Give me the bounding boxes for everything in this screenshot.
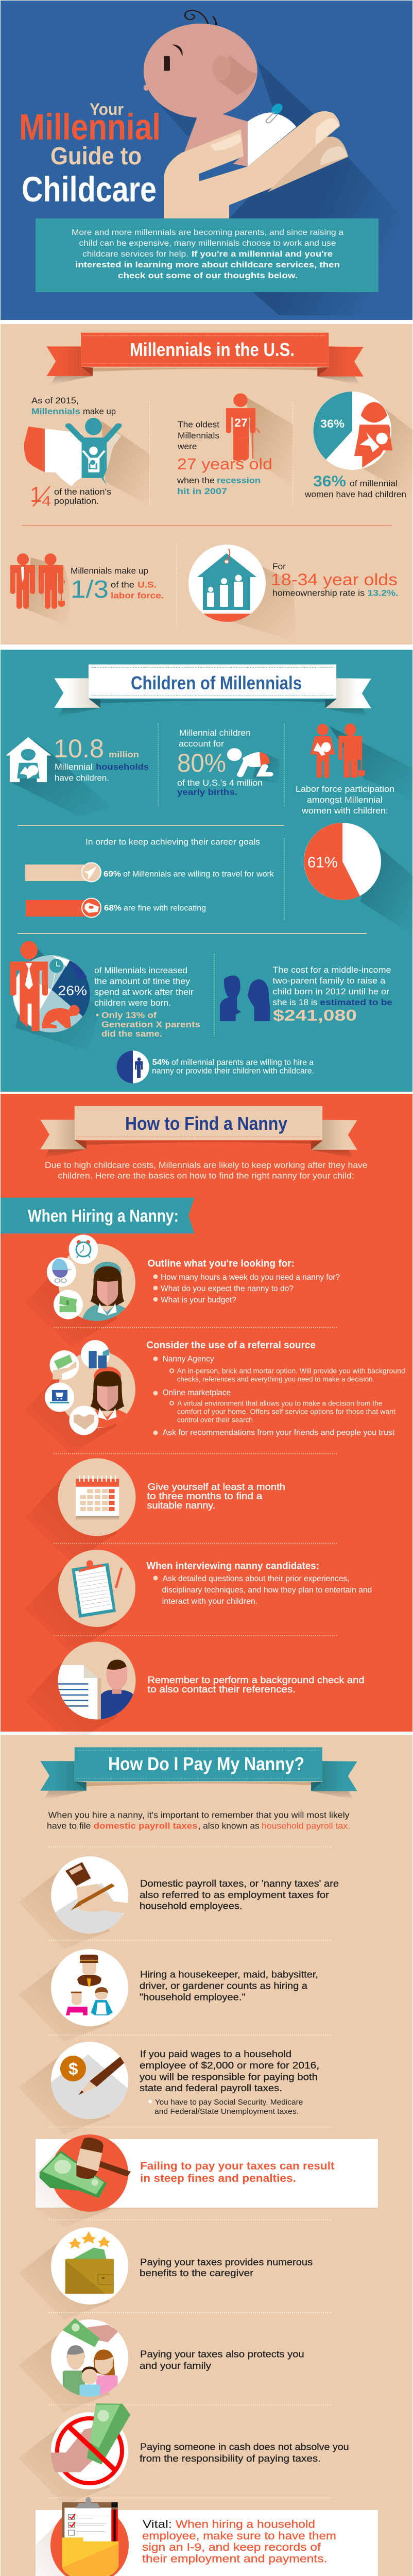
step: outline what you are looking for xyxy=(25,1234,340,1347)
stat: 10.8 million households xyxy=(6,734,149,816)
bar: relocating 68%: are fine with relocating xyxy=(124,904,206,913)
stat: 36% pie chart: of millennial xyxy=(350,479,398,488)
title: Childcare xyxy=(22,170,157,209)
stat: homeownership xyxy=(188,545,399,641)
ribbon heading: Children of Millennials xyxy=(54,665,371,717)
intro panel: interested in learning more about childcare services, then xyxy=(75,261,340,269)
item: household employee: driver, or gardener counts as hiring a xyxy=(140,1980,308,1991)
item: cash does not absolve: Paying someone in cash does not absolve you xyxy=(140,2442,349,2452)
stat: 80% of yearly births: account for xyxy=(179,739,224,749)
item: household employee xyxy=(19,1949,318,2042)
step: interviewing: When interviewing nanny candidates: xyxy=(146,1561,319,1572)
icon: alarm clock xyxy=(69,1234,98,1264)
callout: vital: employee, make sure to have them xyxy=(142,2530,336,2542)
stat: cost of raising a child: $241,080 xyxy=(273,1006,357,1024)
intro panel: childcare services for help. xyxy=(82,250,188,259)
item: paid wages: state and federal payroll taxes. xyxy=(140,2082,282,2093)
stat: 26% more time at work: 26% xyxy=(58,983,87,998)
icon: laptop with cart xyxy=(45,1383,74,1412)
step: outline what you are looking for: Outline what you're looking for: xyxy=(147,1259,295,1269)
icon: family and money xyxy=(63,2325,118,2398)
stat: one quarter of population xyxy=(24,396,150,509)
ribbon heading: How Do I Pay My Nanny xyxy=(40,1747,357,1800)
step: background check xyxy=(25,1641,365,1745)
stat: 36% pie chart: 36% xyxy=(320,417,345,430)
stat: labor force: U.S. xyxy=(137,580,157,590)
stat: 26% more time at work: Generation X parents xyxy=(101,1020,200,1029)
step: referral source: Online marketplace xyxy=(163,1388,231,1397)
step: outline what you are looking for: What is your budget? xyxy=(161,1296,236,1304)
stat: one quarter of population: make up xyxy=(83,406,116,416)
stat: oldest millennials: Millennials xyxy=(178,431,219,440)
item: benefits to caregiver: Paying your taxes provides numerous xyxy=(140,2257,313,2267)
intro panel: If you're a millennial and you're xyxy=(192,250,333,259)
panel: how to find a nanny xyxy=(1,1094,412,1745)
step: referral source: An in-person, brick and mortar option. Will provide you with background xyxy=(177,1367,405,1375)
stat: oldest millennials: hit in 2007 xyxy=(177,486,227,496)
step: referral source: Consider the use of a referral source xyxy=(146,1340,316,1351)
step: referral source: checks, references and everything you need to make a decision. xyxy=(177,1376,374,1383)
step: referral source: Ask for recommendations from your friends and people you trust xyxy=(163,1429,395,1437)
callout: fines and penalties: Failing to pay your taxes can result xyxy=(140,2160,335,2172)
icon: coin and pencil xyxy=(51,2055,129,2120)
item: domestic payroll taxes: household employees. xyxy=(140,1901,242,1911)
icon: household staff xyxy=(66,1955,113,2015)
title: Guide to xyxy=(50,143,142,170)
intro text: have to file xyxy=(47,1821,91,1831)
bar: relocating 68%: 68% xyxy=(104,904,122,913)
item: cash does not absolve xyxy=(19,2403,349,2505)
stat: 10.8 million households: households xyxy=(96,762,149,772)
stat: 54% willing to hire a nanny: 54% xyxy=(152,1058,169,1067)
stat: 54% willing to hire a nanny xyxy=(116,1050,314,1083)
stat: 10.8 million households: million xyxy=(109,750,139,759)
step: referral source: control over their search xyxy=(177,1416,253,1424)
stat: homeownership: 13.2%. xyxy=(368,588,399,598)
title xyxy=(19,100,161,209)
icon: nanny with agency xyxy=(91,1366,127,1427)
stat: 26% more time at work: the amount of time they xyxy=(94,976,191,986)
step: outline what you are looking for: What do you expect the nanny to do? xyxy=(161,1284,294,1293)
stat: cost of raising a child: child born in 2012 until he or xyxy=(272,987,389,996)
stat: labor force: 1/3 xyxy=(71,576,109,603)
title: Millennial xyxy=(19,107,161,148)
callout: fines and penalties: in steep fines and penalties. xyxy=(140,2173,296,2184)
item: paid wages: and Federal/State Unemployment taxes. xyxy=(154,2108,299,2116)
banner: When Hiring a Nanny xyxy=(1,1198,195,1233)
item: benefits to caregiver xyxy=(19,2227,313,2320)
item: paid wages: You have to pay Social Security, Medicare xyxy=(155,2098,303,2107)
stat: oldest millennials: The oldest xyxy=(178,420,219,430)
icon: hand with money xyxy=(49,1350,79,1380)
item: paid wages: employee of $2,000 or more for 2016, xyxy=(140,2060,319,2071)
stat: oldest millennials: recession xyxy=(217,476,261,485)
stat: oldest millennials xyxy=(177,394,293,496)
icon: nanny xyxy=(82,1261,126,1321)
item: paid wages xyxy=(19,2042,319,2134)
icon: money: $ xyxy=(66,1300,69,1306)
title: Your xyxy=(90,100,124,118)
stat: one quarter of population: Millennials xyxy=(31,406,80,416)
stat: 80% of yearly births: of the U.S.'s 4 million xyxy=(177,778,263,788)
icon: money xyxy=(54,1290,83,1319)
item: benefits to caregiver: benefits to the caregiver xyxy=(140,2267,253,2278)
stat: oldest millennials: 27 years old xyxy=(177,455,272,473)
item: paid wages: you will be responsible for paying both xyxy=(140,2071,318,2082)
item: protects family: and your family xyxy=(140,2360,212,2371)
icon: no cash sign xyxy=(51,2403,130,2483)
step: referral source: Nanny Agency xyxy=(163,1355,214,1363)
step: give yourself time: suitable nanny. xyxy=(147,1500,215,1511)
panel: how do I pay my nanny xyxy=(1,1735,412,2576)
ribbon heading: How Do I Pay My Nanny: How Do I Pay My Nanny? xyxy=(108,1753,304,1774)
stat: 36% pie chart xyxy=(304,392,413,499)
step: interviewing: interact with your children. xyxy=(162,1597,257,1606)
stat: 10.8 million households: Millennial xyxy=(55,762,93,772)
stat: cost of raising a child: two-parent family to raise a xyxy=(272,976,386,986)
stat: 26% more time at work: Only 13% of xyxy=(101,1010,157,1020)
step: referral source: A virtual environment that allows you to make a decision from the xyxy=(177,1399,382,1407)
intro panel xyxy=(36,218,378,292)
stat: labor force participation with 61% pie xyxy=(296,723,413,935)
icon: coin and pencil: $ xyxy=(68,2059,78,2078)
step: referral source: comfort of your home. Offers self service options for those that want xyxy=(177,1408,395,1416)
callout: vital: their employment and payments. xyxy=(142,2553,328,2565)
stat: one quarter of population: of the nation's xyxy=(54,487,111,497)
stat: cost of raising a child: she is 18 is xyxy=(272,997,317,1007)
ribbon heading: Children of Millennials: Children of Millennials xyxy=(131,672,302,693)
callout: vital: When hiring a household xyxy=(176,2519,315,2531)
stat: labor force participation with 61% pie: Labor force participation xyxy=(296,784,394,794)
stat: labor force: Millennials make up xyxy=(71,566,148,575)
panel: millennials in the U.S. xyxy=(1,324,413,645)
stat: homeownership: 18-34 year olds xyxy=(271,570,398,589)
icon: stroller xyxy=(47,1257,76,1287)
callout: fines and penalties xyxy=(36,2134,378,2227)
item: protects family xyxy=(19,2318,304,2412)
stat: 80% of yearly births: 80% xyxy=(177,749,226,777)
step: interviewing: disciplinary techniques, and how they plan to entertain and xyxy=(162,1586,372,1595)
callout: vital: Vital: xyxy=(143,2519,172,2531)
ribbon heading: How to Find a Nanny xyxy=(40,1106,357,1159)
icon: gavel on money xyxy=(40,2138,129,2198)
stat: 26% more time at work: did the same. xyxy=(101,1029,162,1039)
step: referral source xyxy=(25,1340,405,1454)
icon: wallet and stars xyxy=(65,2231,114,2294)
icon: handshake xyxy=(69,1405,99,1435)
intro text xyxy=(45,1160,368,1181)
stat: labor force: labor force. xyxy=(111,590,164,600)
item: paid wages: If you paid wages to a household xyxy=(140,2048,291,2059)
item: domestic payroll taxes: Domestic payroll taxes, or 'nanny taxes' are xyxy=(140,1878,339,1889)
panel: hero xyxy=(1,1,413,320)
icon: document and man xyxy=(57,1659,134,1720)
stat: 26% more time at work: spend at work after their xyxy=(94,987,194,997)
banner: When Hiring a Nanny: When Hiring a Nanny: xyxy=(28,1206,179,1226)
intro panel: More and more millennials are becoming parents, and since raising a xyxy=(72,228,343,237)
ribbon heading: Millennials in the U.S. xyxy=(47,333,364,385)
step: background check: Remember to perform a background check and xyxy=(147,1675,365,1685)
step: outline what you are looking for: How many hours a week do you need a nanny for? xyxy=(161,1273,340,1282)
stat: 36% pie chart: 36% xyxy=(313,473,346,490)
intro text xyxy=(47,1810,350,1831)
intro panel: check out some of our thoughts below. xyxy=(118,272,298,280)
stat: one quarter of population: population. xyxy=(54,496,99,506)
intro text: Due to high childcare costs, Millennials are likely to keep working after they have xyxy=(45,1160,368,1170)
callout: vital xyxy=(36,2497,378,2576)
stat: oldest millennials: when the xyxy=(177,476,215,485)
stat: one quarter of population: As of 2015, xyxy=(31,396,79,405)
item: household employee: Hiring a housekeeper, maid, babysitter, xyxy=(140,1969,318,1980)
stat: 26% more time at work: of Millennials increased xyxy=(94,965,187,975)
stat: labor force participation with 61% pie: women with children: xyxy=(301,806,388,816)
intro text: children. Here are the basics on how to find the right nanny for your child: xyxy=(58,1171,354,1181)
stat: 10.8 million households: 10.8 xyxy=(54,734,104,763)
bar: travel 69%: 69% xyxy=(104,870,121,878)
intro text: household payroll tax. xyxy=(262,1821,350,1831)
ribbon heading: How to Find a Nanny: How to Find a Nanny xyxy=(125,1113,287,1134)
stat: labor force participation with 61% pie: amongst Millennial xyxy=(307,795,383,805)
icon: clipboard and folder xyxy=(62,2497,118,2576)
stat: cost of raising a child: estimated to be xyxy=(320,997,392,1007)
stat: labor force participation with 61% pie: 61% xyxy=(307,854,338,871)
stat: 26% more time at work xyxy=(10,941,200,1051)
stat: labor force: of the xyxy=(111,580,134,590)
stat: oldest millennials: were xyxy=(177,442,197,451)
bar: relocating 68% xyxy=(26,899,206,917)
stat: homeownership: For xyxy=(272,562,286,571)
bar: travel 69% xyxy=(25,862,274,882)
step: give yourself time xyxy=(25,1458,285,1562)
intro text: When you hire a nanny, it's important to remember that you will most likely xyxy=(48,1810,350,1820)
stat: homeownership: homeownership rate is xyxy=(272,588,365,598)
item: protects family: Paying your taxes also protects you xyxy=(140,2349,304,2360)
step: give yourself time: Give yourself at least a month xyxy=(147,1482,285,1492)
stat: 80% of yearly births: yearly births. xyxy=(177,787,237,797)
step: background check: to also contact their references. xyxy=(147,1684,296,1694)
icon: clipboard xyxy=(72,1560,122,1618)
illustration: baby held in a hand xyxy=(144,10,348,218)
stat: labor force xyxy=(10,553,164,626)
stat: 36% pie chart: women have had children xyxy=(304,489,406,499)
panel: children of millennials xyxy=(1,650,413,1092)
stat: 26% more time at work: children were born. xyxy=(94,998,171,1008)
callout: vital: sign an I-9, and keep records of xyxy=(142,2541,321,2553)
stat: 10.8 million households: have children. xyxy=(55,773,109,783)
step: interviewing xyxy=(25,1550,372,1653)
icon: calendar xyxy=(76,1476,119,1520)
item: household employee: "household employee." xyxy=(140,1991,246,2002)
step: interviewing: Ask detailed questions about their prior experiences, xyxy=(163,1574,350,1583)
item: domestic payroll taxes: also referred to as employment taxes for xyxy=(140,1889,329,1900)
intro text: , also known as xyxy=(198,1821,260,1831)
stat: cost of raising a child: The cost for a middle-income xyxy=(272,965,391,975)
intro text: domestic payroll taxes xyxy=(94,1821,198,1831)
stat: one quarter of population: 1 xyxy=(30,482,42,506)
stat: 80% of yearly births xyxy=(177,728,279,797)
stat: oldest millennials: 27 xyxy=(234,416,248,429)
stat: 54% willing to hire a nanny: of millennial parents are willing to hire a xyxy=(171,1058,314,1067)
icon: hand writing with calculator xyxy=(51,1862,129,1935)
stat: 54% willing to hire a nanny: nanny or provide their children with childcare. xyxy=(152,1066,314,1076)
stat bars: career goals: In order to keep achieving their career goals xyxy=(85,837,260,847)
item: cash does not absolve: from the responsibility of paying taxes. xyxy=(140,2453,321,2464)
icon: office building xyxy=(81,1340,110,1369)
item: domestic payroll taxes xyxy=(19,1856,339,1949)
stat: one quarter of population: 4 xyxy=(42,493,51,509)
bar: travel 69%: of Millennials are willing to travel for work xyxy=(123,870,274,878)
step: give yourself time: to three months to find a xyxy=(147,1491,263,1501)
stat: 80% of yearly births: Millennial children xyxy=(179,728,251,738)
ribbon heading: Millennials in the U.S.: Millennials in the U.S. xyxy=(130,339,295,360)
stat bars: career goals xyxy=(25,837,274,917)
intro panel: child can be expensive, many millennials choose to work and use xyxy=(79,239,336,248)
stat: cost of raising a child xyxy=(220,965,392,1024)
